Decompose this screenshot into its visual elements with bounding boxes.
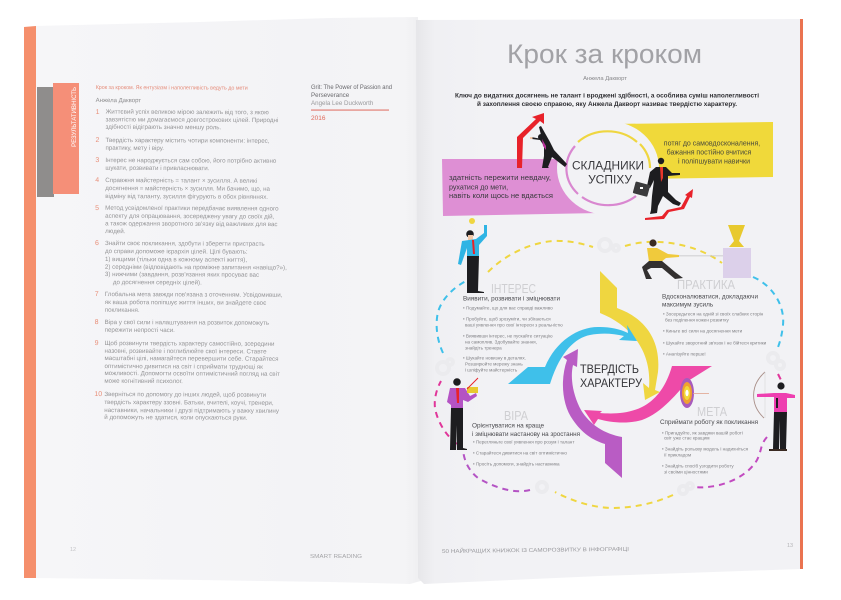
point 4: досягнення = майстерність × зусилля. Ми бачимо, що, на [105, 185, 271, 193]
icon: man with briefcase [633, 158, 681, 214]
point 10: твердість характеру ззовні. Батьки, вчителі, коучі, тренери, [104, 399, 274, 407]
tips: • Пробуйте, щоб зрозуміти, чи збігаються [463, 316, 551, 322]
icon: archer [754, 372, 795, 451]
tips: • Аналізуйте перше! [663, 350, 706, 356]
footer left [70, 547, 362, 560]
point 6: Знайти своє покликання, здобути і зберегти пристрасть [105, 240, 265, 248]
point 1 [96, 109, 278, 131]
point 9: Щоб розвинути твердість характеру самостійно, зсередини [105, 340, 275, 348]
point 4: Справжня майстерність = талант × зусилля. А великі [105, 177, 257, 185]
panel: components of success [442, 113, 773, 220]
point 8: 8 [95, 319, 99, 326]
gears [437, 239, 784, 494]
ring label: СКЛАДНИКИ [572, 158, 644, 172]
author: Анжела Дакворт [583, 76, 627, 82]
ring label [572, 158, 644, 186]
yellow block [610, 122, 773, 179]
point 7: Глобальна мета завжди пов'язана з оточенням. Усвідомивши, [105, 291, 283, 299]
tips: • Киньте всі сили на досягнення мети [663, 328, 743, 334]
heading: ПРАКТИКА [677, 278, 736, 292]
point 5 [95, 205, 279, 236]
point 1: Життєвий успіх великою мірою залежить від того, з якою [106, 109, 269, 116]
point 6: до досягнення середніх цілей). [113, 279, 202, 286]
panel: мета [660, 372, 795, 474]
summary heading: Крок за кроком. Як ентузіазм і наполегливість ведуть до мети [96, 85, 248, 92]
point 9: може когнітивний психолог. [104, 378, 183, 385]
heading: ВІРА [504, 409, 529, 423]
point 9: 9 [95, 340, 99, 347]
subheading: Виявити, розвивати і зміцнювати [463, 294, 560, 302]
point 3: 3 [95, 157, 99, 164]
panel: практика [642, 225, 767, 356]
point 10: Зверніться по допомогу до інших людей, щоб розвинути [104, 391, 267, 399]
heading: МЕТА [697, 405, 728, 419]
point 6: 6 [95, 240, 99, 247]
tips [463, 304, 563, 372]
point 9: можливості. Допомогти освоїти оптимістичний погляд на світ [104, 370, 280, 378]
running book title: 50 НАЙКРАЩИХ КНИЖОК ІЗ САМОРОЗВИТКУ В ІНФОГРАФІЦІ [442, 545, 630, 555]
icon: man pulling rope [642, 239, 723, 279]
point 8 [95, 319, 269, 334]
point 8: пережити непрості часи. [105, 327, 175, 334]
icon: man pushing arrow [530, 126, 567, 168]
right book page [416, 19, 803, 584]
book reference: Perseverance [311, 92, 350, 99]
point 4: відміну від таланту, зусилля фігурують в обох рівняннях. [105, 193, 268, 201]
arrow: yellow [600, 271, 660, 400]
point 5: аспекту для опрацювання, зосереджену увагу до своїх дій, [105, 213, 275, 220]
tips [662, 430, 749, 474]
intro paragraph [455, 92, 759, 108]
page number 13: 13 [787, 543, 793, 549]
point 6 [95, 240, 287, 287]
panel: віра: і зміцнювати настанову на зростання [472, 430, 581, 438]
tips: без поділення кожен розвитку [665, 318, 729, 322]
tips: • Пригадуйте, як завдяки вашій роботі [662, 430, 743, 436]
icon: target with arrow [680, 378, 709, 408]
page number 12: 12 [70, 547, 76, 553]
title: Крок за кроком [507, 39, 702, 69]
tips: Розширюйте мережу знань [465, 360, 523, 366]
panel: інтерес [458, 218, 563, 372]
central label: ХАРАКТЕРУ [580, 377, 643, 390]
tips: знайдіть тренера [465, 344, 502, 350]
point 4: 4 [95, 177, 99, 184]
white circle [557, 121, 659, 215]
book author: Angela Lee Duckworth [311, 100, 374, 107]
point 10 [94, 391, 280, 422]
point 5: а також одержання зворотного зв'язку від важливих для вас [105, 220, 278, 228]
point 7: 7 [95, 291, 99, 298]
central label: ТВЕРДІСТЬ [580, 363, 639, 376]
yellow block text [664, 140, 760, 166]
summary author: Анжела Дакворт [96, 98, 141, 104]
intro paragraph: Ключ до видатних досягнень не талант і вроджені здібності, а особлива суміш наполегливості [455, 92, 759, 100]
ring [566, 131, 650, 205]
point 1: 1 [96, 109, 100, 116]
tips: • Шукайте зворотний зв'язок і не бійтеся критики [663, 340, 767, 346]
book reference [311, 84, 393, 122]
subheading: Сприймати роботу як покликання [660, 418, 759, 426]
tips: • Подумайте, що для вас справді важливо [463, 304, 553, 310]
panel: практика: максимум зусиль [662, 302, 714, 308]
point 6: до справи допоможе ієрархія цілей. Цілі бувають: [105, 248, 248, 256]
tips: • Виявивши інтерес, не пускайте ситуацію [463, 332, 553, 338]
yellow block text: потяг до самовдосконалення, [664, 140, 760, 148]
tips: її прикладом [663, 452, 691, 458]
point 6: 1) вищими (тільки одна в кожному аспекті життя), [105, 256, 247, 264]
ring label: УСПІХУ [588, 172, 632, 186]
point 2 [95, 137, 270, 152]
point 6: 2) середніми (відповідають на проміжне запитання «навіщо?»), [105, 264, 287, 272]
panel: віра [447, 378, 581, 466]
point 9: оптимістично дивитися на світ і сприймати труднощі як [104, 363, 263, 371]
point 2: практику, мету і віру. [105, 145, 164, 152]
left book page [24, 17, 424, 584]
dashed cycle path [435, 241, 783, 508]
point 10: наставники, начальники і друзі підтримають у важку хвилину [104, 407, 280, 415]
left page summary text [94, 85, 288, 422]
point 3: шукати, розвивати і привласнювати. [105, 165, 210, 172]
tab label: РЕЗУЛЬТАТИВНІСТЬ [71, 87, 78, 147]
central label [580, 363, 643, 390]
point 5: людей. [105, 228, 126, 235]
central swirl arrows [508, 271, 712, 478]
tips: зі своїми цінностями [664, 470, 708, 474]
tips: • Старайтеся дивитися на світ оптимістично [473, 450, 567, 456]
running title: SMART READING [310, 554, 362, 560]
point 7 [95, 291, 283, 315]
point 2: 2 [95, 137, 99, 144]
point 9: назовні, розвивайте і поглиблюйте свої інтереси. Ставте [105, 348, 267, 355]
point 9: масштабні цілі, намагайтеся перевершити себе. Старайтеся [105, 355, 279, 363]
pink block text [449, 174, 553, 200]
pink block text: навіть коли щось не вдається [449, 192, 553, 200]
icon: man with chart [447, 378, 478, 450]
point 5: 5 [95, 205, 99, 212]
icon: pedestal and trophy [723, 225, 751, 278]
arrow: blue [508, 325, 637, 384]
point 1: завзятістю ми домагаємося довгострокових цілей. Природні [106, 116, 278, 124]
yellow block text: і поліпшувати навички [678, 158, 750, 166]
tips: світ уже стає кращим [664, 436, 710, 440]
point 4 [95, 177, 271, 201]
yellow block text: бажання постійно вчитися [667, 148, 752, 156]
point 1: здібності відіграють значно меншу роль. [106, 124, 222, 131]
point 8: Віра у свої сили і налаштування на розвиток допоможуть [105, 319, 269, 327]
book year: 2016 [311, 115, 326, 122]
pink block [442, 159, 600, 216]
tips: • Зосередьтеся на одній зі своїх слабких сторін [663, 310, 764, 316]
point 3 [95, 157, 277, 172]
point 10: й допоможуть не здатися, коли опускаються руки. [104, 414, 248, 422]
point 6: 3) нижчими (завдання, розв'язання яких просуває вас [105, 271, 259, 279]
subheading: Орієнтуватися на краще [472, 422, 545, 430]
pink block text: здатність пережити невдачу, [449, 174, 551, 182]
side tab: результативність [37, 83, 79, 197]
tips: • Знайдіть рольову модель і надихніться [662, 446, 749, 452]
footer right [442, 543, 793, 555]
pink block text: рухатися до мети, [449, 184, 508, 192]
orange page edge left [24, 26, 36, 578]
icon: man with lightbulb [458, 218, 487, 293]
arrow: pink [584, 366, 712, 425]
tips: ваші уявлення про свої інтереси з реальністю [465, 322, 563, 328]
tips: і шліфуйте майстерність [465, 366, 518, 372]
tips [473, 440, 575, 466]
tips: • Знайдіть спосіб узгодити роботу [662, 462, 734, 468]
icon: red stair arrow [645, 189, 693, 220]
point 2: Твердість характеру містить чотири компоненти: інтерес, [105, 137, 270, 145]
intro paragraph: й захоплення своєю справою, яку Анжела Дакворт називає твердістю характеру. [477, 100, 737, 108]
point 5: Метод усвідомленої практики передбачає виявлення одного [105, 205, 279, 213]
tips: • Шукайте новизну в деталях. [463, 354, 526, 360]
tips: на самоплив. Здобувайте знання, [465, 338, 537, 344]
tips: • Перегляньте свої уявлення про розум і талант [473, 440, 575, 444]
tips: • Просіть допомоги, знайдіть наставника [473, 460, 560, 466]
heading: ІНТЕРЕС [491, 282, 536, 296]
point 3: Інтерес не народжується сам собою, його потрібно активно [105, 157, 277, 165]
subheading: Вдосконалюватися, докладаючи [662, 294, 758, 300]
arrow: purple [563, 349, 622, 478]
point 9 [94, 340, 280, 386]
point 10: 10 [94, 391, 102, 398]
tips [663, 310, 767, 356]
icon: red arrow up [517, 113, 544, 168]
orange page edge right [800, 19, 803, 569]
point 7: як ваша робота поліпшує життя інших, ви знайдете своє [105, 299, 266, 307]
point 7: покликання. [105, 307, 140, 314]
book title: Grit: The Power of Passion and [311, 84, 393, 91]
